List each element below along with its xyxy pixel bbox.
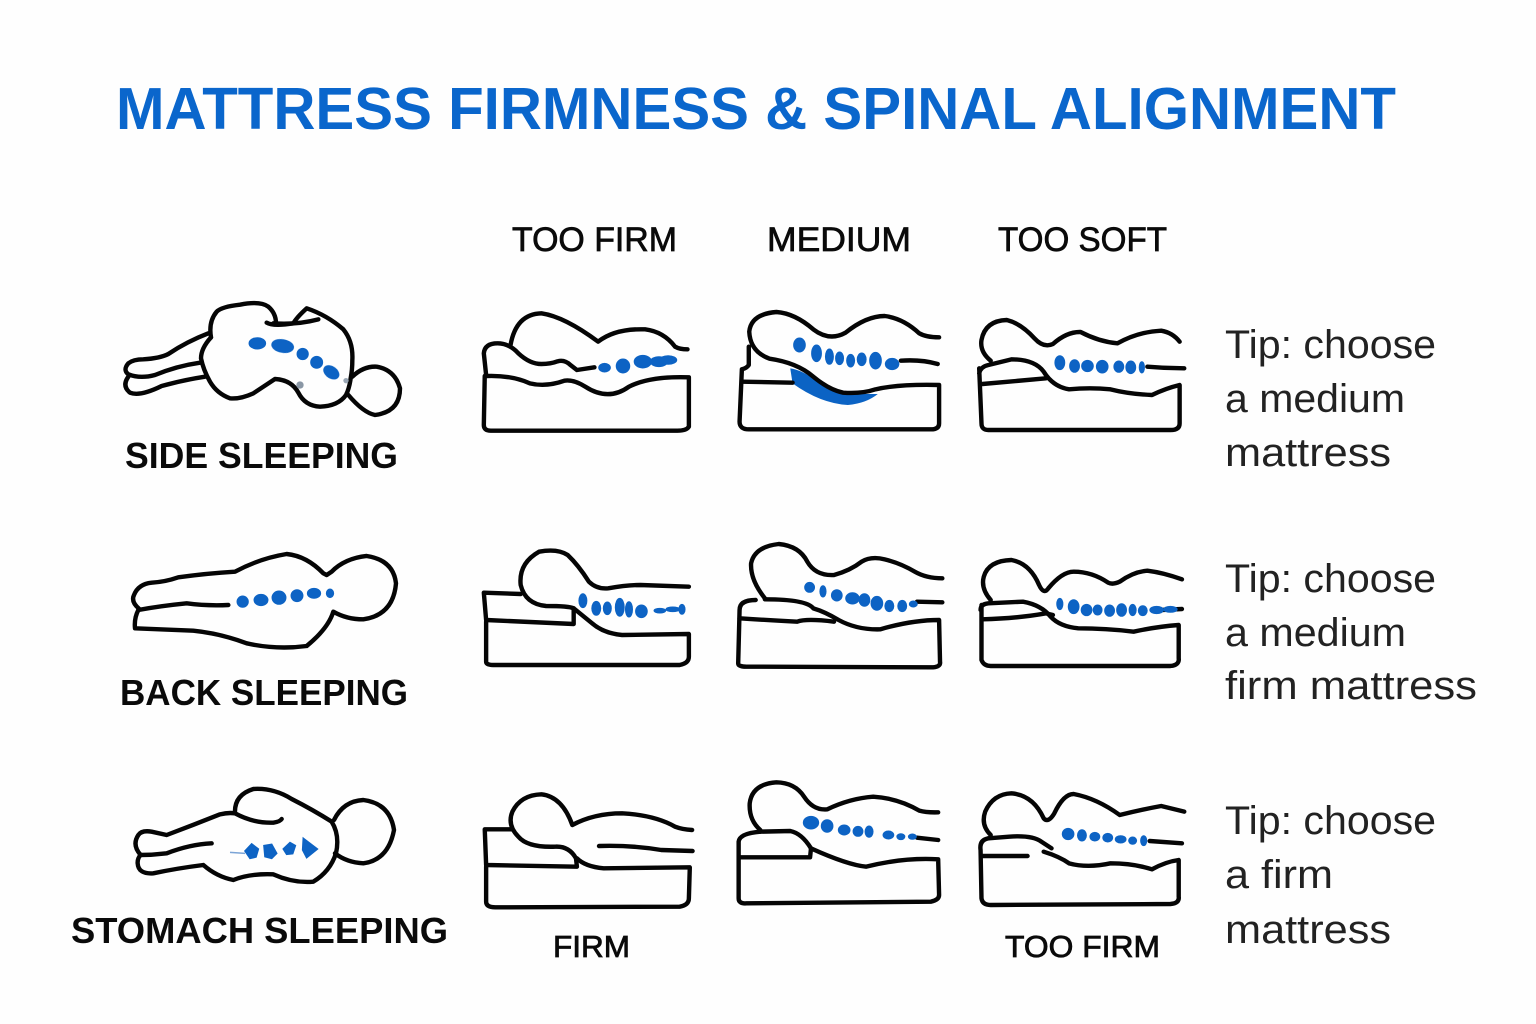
tip: side sleeping: Tip: choose — [1225, 323, 1436, 367]
tip: stomach sleeping: mattress — [1225, 908, 1391, 952]
tip: back sleeping: firm mattress — [1225, 664, 1477, 708]
tip: back sleeping: a medium — [1225, 611, 1406, 655]
heading: medium: MEDIUM — [767, 221, 911, 259]
label: back sleeping: BACK SLEEPING — [120, 672, 408, 713]
label: side sleeping: SIDE SLEEPING — [125, 435, 398, 476]
tip: side sleeping: a medium — [1225, 377, 1405, 421]
tip: side sleeping — [1225, 323, 1436, 475]
caption: firm: FIRM — [553, 929, 630, 964]
tip: side sleeping: mattress — [1225, 431, 1391, 475]
title: MATTRESS FIRMNESS & SPINAL ALIGNMENT — [116, 76, 1396, 142]
cell: stomach sleeping, firm — [485, 794, 693, 907]
icon: back sleeper figure — [133, 554, 396, 647]
cell: back sleeping, too soft — [981, 560, 1182, 666]
tip: stomach sleeping: Tip: choose — [1225, 799, 1436, 843]
cell: side sleeping, medium — [740, 312, 939, 429]
heading: too soft: TOO SOFT — [998, 221, 1167, 259]
cell: back sleeping, too firm — [484, 551, 689, 665]
tip: back sleeping — [1225, 557, 1477, 708]
tip: stomach sleeping — [1225, 799, 1436, 952]
cell: side sleeping, too soft — [979, 320, 1184, 430]
cell: side sleeping, too firm — [484, 313, 689, 431]
caption: too firm: TOO FIRM — [1005, 929, 1160, 964]
icon: side sleeper figure — [125, 303, 400, 415]
label: stomach sleeping: STOMACH SLEEPING — [71, 910, 448, 951]
cell: stomach sleeping, medium — [739, 782, 939, 903]
column headings — [512, 221, 1167, 259]
tip: back sleeping: Tip: choose — [1225, 557, 1436, 601]
heading: too firm: TOO FIRM — [512, 221, 677, 259]
cell: back sleeping, medium — [738, 544, 942, 667]
tip: stomach sleeping: a firm — [1225, 853, 1333, 897]
icon: stomach sleeper figure — [135, 789, 394, 882]
cell: stomach sleeping, too firm — [980, 793, 1184, 905]
